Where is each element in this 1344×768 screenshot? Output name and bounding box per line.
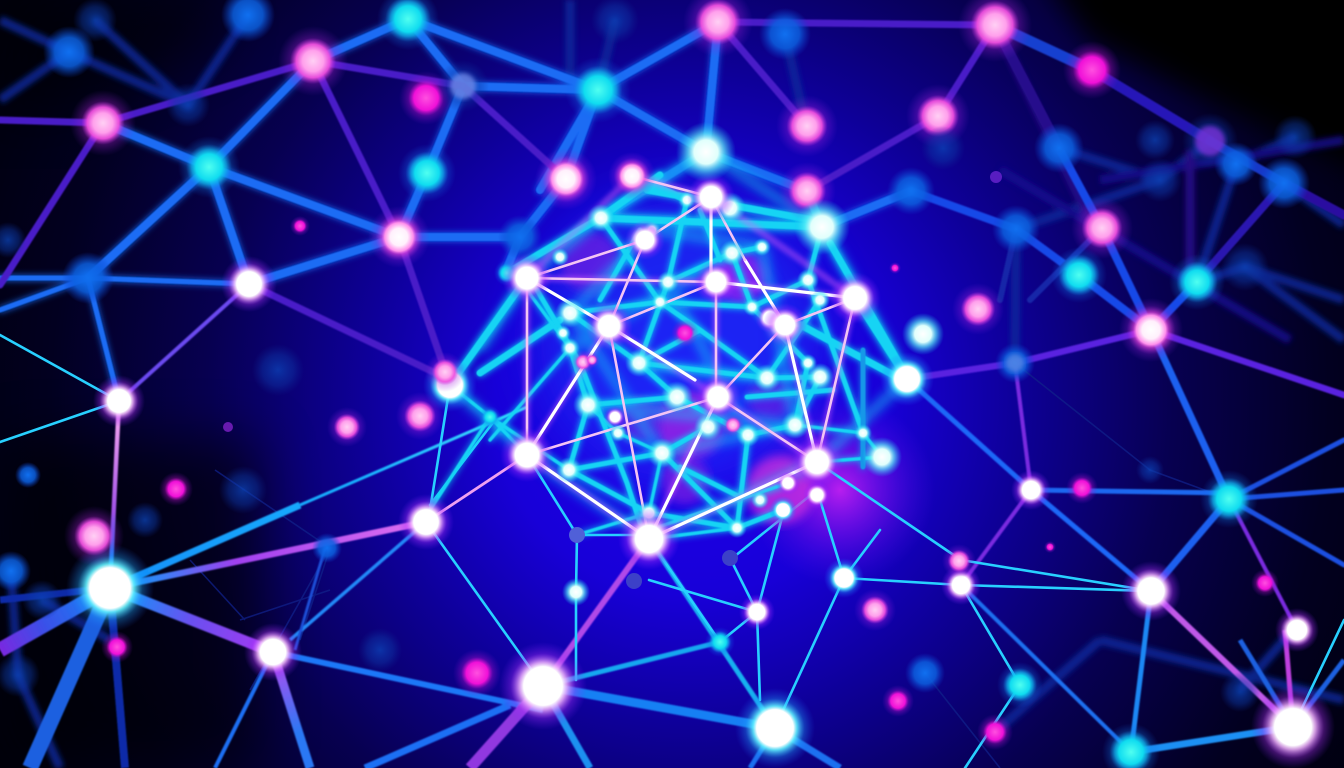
central cyan mesh [430,152,907,539]
thin cyan links [0,335,1344,768]
upper and centre blue links [0,19,911,401]
purple links [0,22,1344,630]
central white polyhedron [527,176,855,539]
thin far links [190,363,1229,768]
mesh inner nodes [479,191,872,538]
right side soft blue links [907,25,1344,591]
near foreground thick links [0,401,1344,768]
bright white nodes [66,152,1335,768]
pink link to centre [426,455,527,522]
